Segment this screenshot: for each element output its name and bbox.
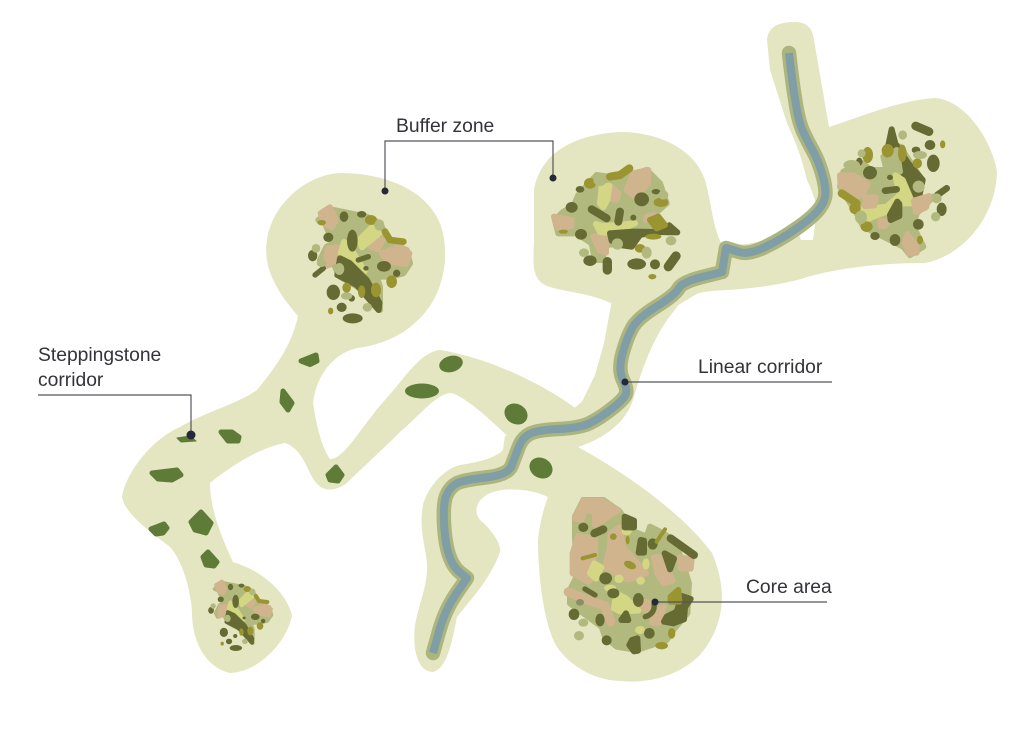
callout: steppingstone corridor: corridor — [38, 370, 104, 391]
buffer: left network with stepping stones — [122, 173, 578, 673]
buffer: large core patch — [538, 447, 722, 682]
linear corridor river — [433, 53, 826, 653]
core area: small lower left — [208, 581, 271, 651]
callout: steppingstone corridor: Steppingstone — [38, 345, 161, 366]
buffer: right patch and upper corridor — [680, 22, 997, 303]
core area: large — [568, 500, 694, 651]
callout: linear corridor — [622, 357, 832, 386]
callout: buffer zone: Buffer zone — [396, 116, 494, 137]
buffer: lower corridor — [414, 430, 578, 672]
stepping stones — [151, 353, 556, 566]
callout: core area: Core area — [746, 577, 832, 598]
core area: top middle — [554, 168, 677, 279]
callout: linear corridor: Linear corridor — [698, 357, 823, 378]
callout: steppingstone corridor — [38, 345, 196, 440]
buffer: linear corridor centre — [500, 290, 690, 470]
callout: core area — [652, 577, 832, 606]
core area: upper left — [308, 207, 410, 323]
core area: top right — [840, 126, 947, 255]
callout: buffer zone — [382, 116, 556, 194]
buffer zone network — [122, 22, 997, 682]
buffer: top middle patch — [533, 132, 722, 410]
